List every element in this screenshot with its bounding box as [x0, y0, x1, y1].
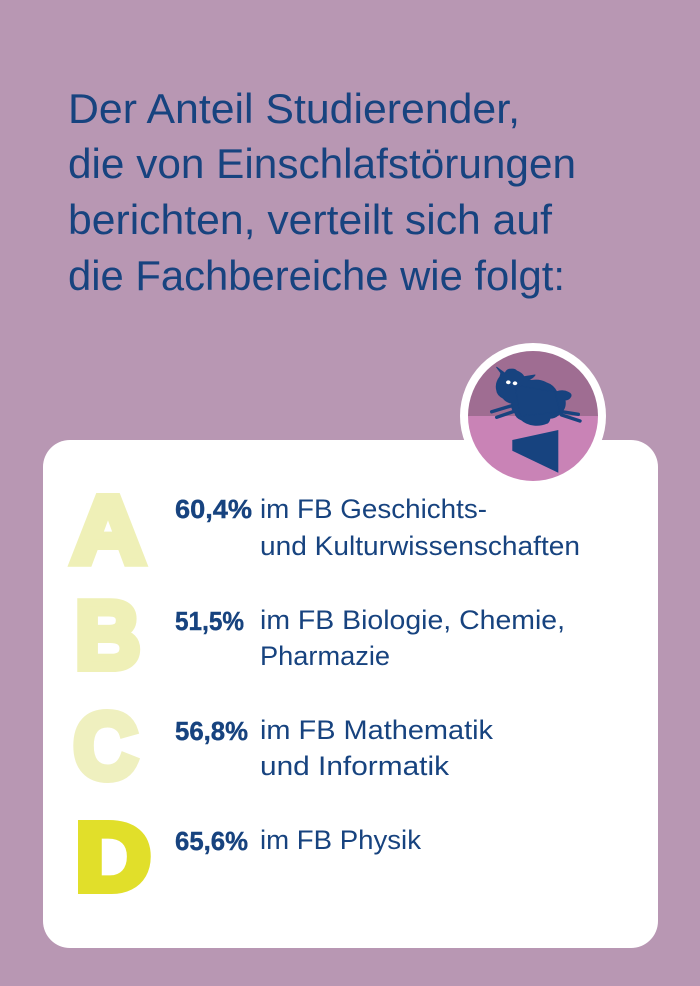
letter C: C	[74, 694, 138, 798]
row A text: 60,4%	[175, 494, 252, 524]
title: die Fachbereiche wie folgt:	[68, 252, 565, 299]
row B text	[175, 605, 565, 671]
sheep body	[496, 367, 571, 425]
icon: sheep jumping over a hurdle	[460, 343, 606, 489]
row D text: 65,6%	[175, 826, 248, 856]
letter B: B	[75, 582, 140, 689]
panel: results card	[43, 440, 658, 948]
row A text: im FB Geschichts-	[260, 494, 487, 524]
row B text: im FB Biologie, Chemie,	[260, 605, 565, 635]
row C text	[175, 715, 494, 781]
title	[68, 85, 576, 299]
sheep eyes	[506, 380, 517, 385]
title: die von Einschlafstörungen	[68, 140, 576, 187]
row B text: 51,5%	[175, 606, 244, 636]
row A text	[175, 494, 580, 561]
row C text: und Informatik	[260, 751, 450, 781]
row B text: Pharmazie	[260, 641, 390, 671]
row D text: im FB Physik	[260, 825, 422, 855]
title: berichten, verteilt sich auf	[68, 196, 552, 243]
title: Der Anteil Studierender,	[68, 85, 520, 132]
hurdle	[512, 430, 558, 473]
row D text	[175, 825, 422, 856]
row C text: im FB Mathematik	[260, 715, 494, 745]
letter A: A	[71, 477, 145, 584]
sheep legs	[492, 406, 580, 421]
row A text: und Kulturwissenschaften	[260, 531, 580, 561]
row C text: 56,8%	[175, 716, 248, 746]
letter D: D	[75, 804, 151, 911]
